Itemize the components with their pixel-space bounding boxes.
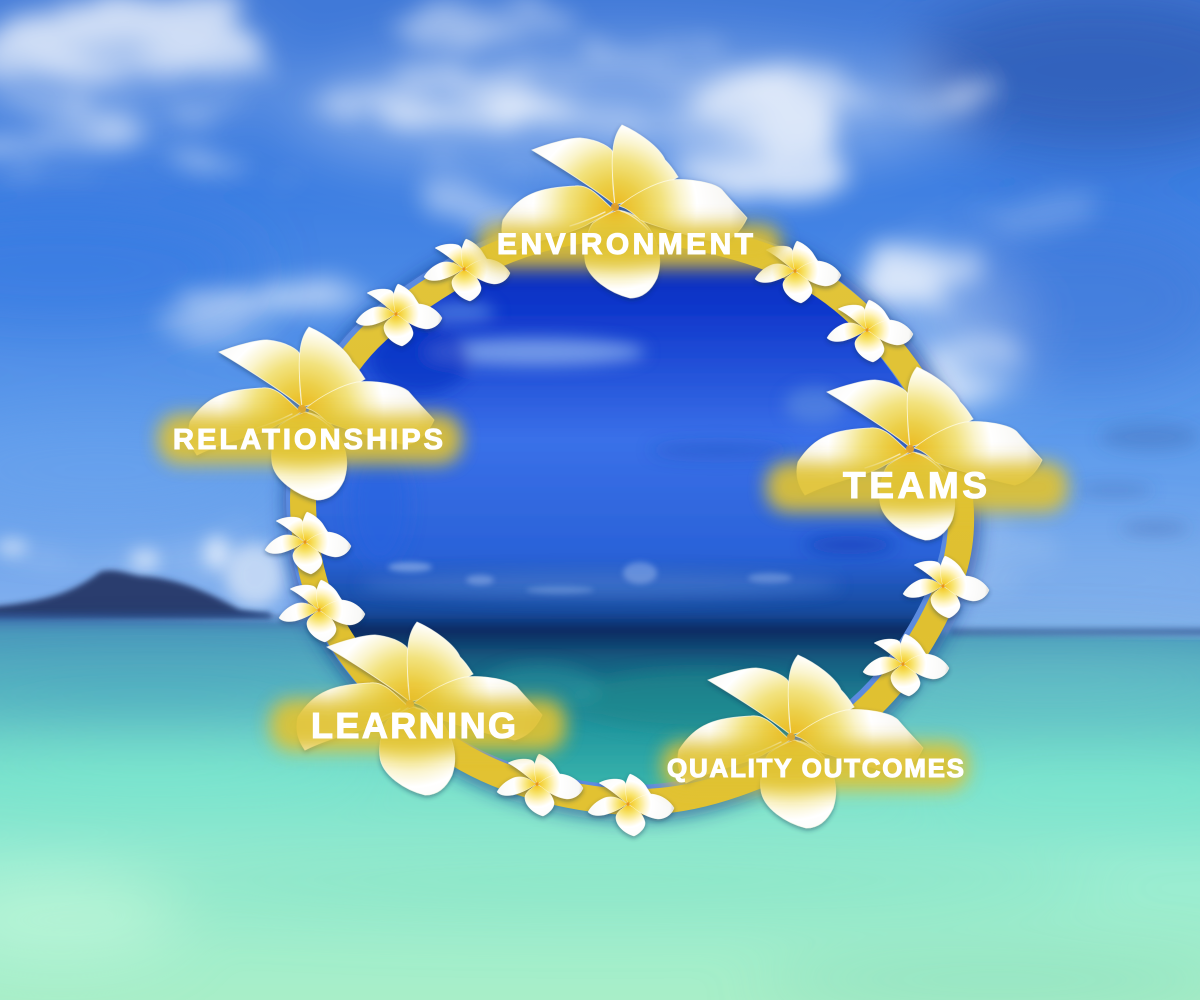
node: Learning — [270, 622, 566, 795]
ring shadow halo — [303, 229, 961, 802]
label glow — [766, 462, 1068, 512]
small flower: upper right 2 — [827, 300, 913, 362]
ring: golden band — [303, 229, 961, 802]
horizon clouds and dark cloud streaks — [0, 423, 1200, 571]
clouds — [0, 0, 1105, 590]
icon: plumeria flower — [502, 125, 747, 298]
label: ENVIRONMENT — [497, 228, 753, 261]
label glow — [662, 742, 968, 790]
label glow — [478, 224, 782, 268]
label glow — [270, 699, 566, 751]
small flower: left 1 — [265, 512, 351, 574]
icon: plumeria flower — [189, 327, 434, 500]
label glow — [158, 414, 462, 464]
label: TEAMS — [843, 465, 987, 506]
sea colour patches — [0, 652, 1200, 1000]
icon: plumeria flower — [678, 655, 923, 828]
node: Teams — [766, 367, 1068, 540]
label: QUALITY OUTCOMES — [667, 753, 964, 783]
sea — [0, 615, 1200, 1000]
small flower: bottom 1 — [497, 754, 583, 816]
interior clouds — [350, 302, 895, 730]
small flower: upper right 1 — [755, 241, 841, 303]
label: RELATIONSHIPS — [173, 424, 443, 456]
distant island — [0, 570, 285, 620]
small flower: left 2 — [279, 580, 365, 642]
node: Environment — [478, 125, 782, 298]
node: Quality Outcomes — [662, 655, 968, 828]
small flower: upper left 1 — [424, 239, 510, 301]
icon: plumeria flower — [797, 367, 1042, 540]
small flower: upper left 2 — [356, 284, 442, 346]
small flower: right 2 — [863, 634, 949, 696]
node: Relationships — [158, 327, 462, 500]
ring interior: saturated deep blue lens — [303, 229, 961, 802]
small flower: right 1 — [903, 556, 989, 618]
sky shading — [0, 0, 1200, 620]
small flower: bottom 2 — [588, 774, 674, 836]
icon: plumeria flower — [297, 622, 542, 795]
ring: blue rim — [299, 225, 957, 798]
label: LEARNING — [311, 705, 516, 746]
